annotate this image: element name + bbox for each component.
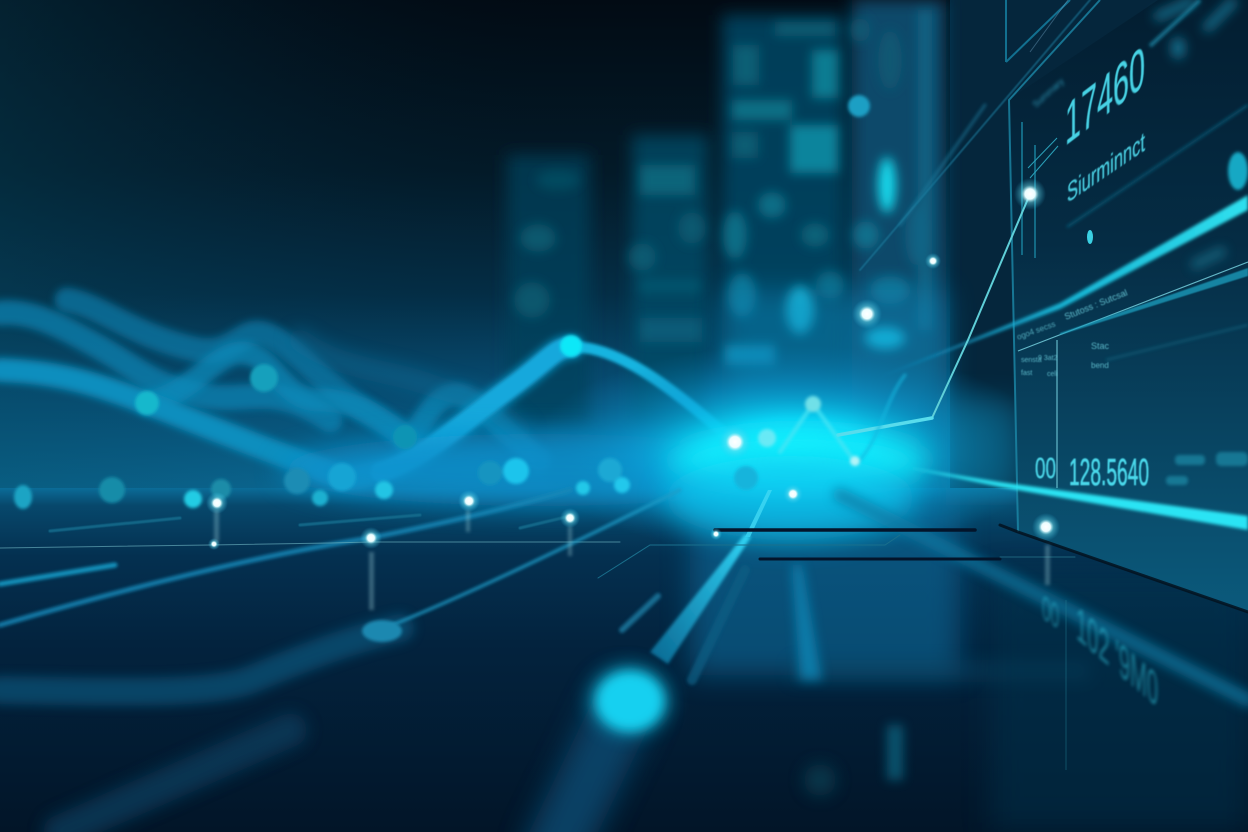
blurred teal nodes <box>14 335 860 738</box>
panel small label: Summary <box>1031 76 1066 109</box>
panel table mini text: sensta <box>1021 357 1042 364</box>
panel table mini text: celi <box>1047 371 1058 378</box>
lit floor column below glow <box>690 490 1248 832</box>
line chart: peak to spark <box>780 194 1030 462</box>
panel table mini text: Stac <box>1091 341 1110 351</box>
floor streaks <box>0 490 1248 832</box>
node reflections <box>214 510 1050 610</box>
panel subtitle: Siurminnct <box>1067 126 1145 209</box>
panel table mini text <box>1021 341 1110 378</box>
floor reflection of readout <box>1042 587 1158 719</box>
central horizon glow <box>280 290 1050 555</box>
panel blurred readout <box>1166 452 1248 485</box>
floor <box>0 488 1248 832</box>
right data panel: ogo4 secss <box>1016 320 1057 342</box>
panel large readout: number: 128.5640 <box>1069 452 1149 494</box>
blurred data towers <box>507 0 946 490</box>
panel large readout: zero zero: 00 <box>1035 453 1056 485</box>
centre streaks <box>745 490 772 537</box>
panel table mini text: fast <box>1021 370 1032 377</box>
background sky <box>0 0 1248 490</box>
rising streaks on panel <box>860 0 1248 612</box>
panel border <box>1009 0 1100 532</box>
panel table row labels: Stutoss : Sutcsal <box>1063 287 1129 322</box>
panel table grid <box>1018 262 1248 488</box>
left streaks <box>0 490 570 625</box>
blurred wave lines <box>0 300 735 478</box>
panel table mini text: 9 3at2 <box>1038 355 1058 362</box>
panel table mini text: bend <box>1091 361 1109 370</box>
panel lines and dots <box>1022 0 1248 258</box>
right data panel <box>946 0 1248 612</box>
floor reflection of readout: 00 <box>1042 587 1059 637</box>
bright spark nodes <box>206 178 1060 550</box>
floor reflection of readout: 102 '9M0 <box>1076 597 1158 719</box>
